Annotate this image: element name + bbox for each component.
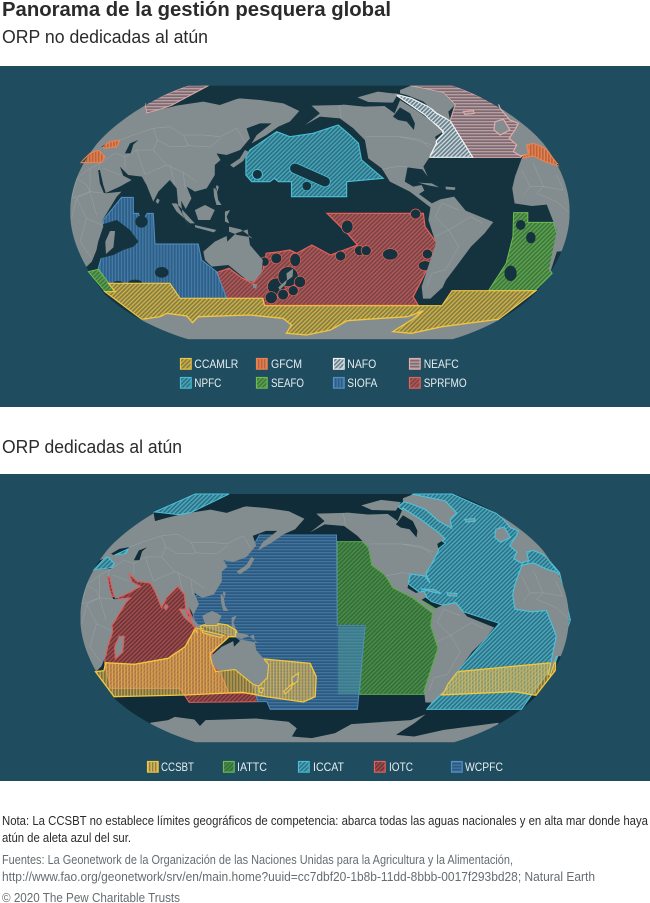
land masses xyxy=(70,494,576,753)
legend: tuna RFMOs xyxy=(148,760,503,774)
legend item: SEAFO: SEAFO xyxy=(271,376,304,390)
legend item: IATTC xyxy=(224,760,267,774)
legend item: IOTC: IOTC xyxy=(389,760,413,774)
world map 2 xyxy=(70,494,576,753)
region: SPRFMO xyxy=(217,209,437,305)
overlap: IATTC and WCPFC xyxy=(338,627,365,694)
sources xyxy=(2,853,595,884)
subtitle: non-tuna RFMOs: ORP no dedicadas al atún xyxy=(2,26,208,47)
region: SIOFA xyxy=(98,197,227,298)
legend item: GFCM xyxy=(256,357,302,371)
legend item: NAFO xyxy=(334,357,376,371)
legend item: NEAFC: NEAFC xyxy=(424,357,459,371)
sources: Fuentes: La Geonetwork de la Organización de las Naciones Unidas para la Agricultura y la Alimentación, xyxy=(2,853,513,867)
region: WCPFC xyxy=(190,535,365,709)
region: CCSBT xyxy=(95,623,556,702)
legend item: SIOFA xyxy=(334,376,377,390)
region: NAFO xyxy=(395,94,473,157)
legend item: SEAFO xyxy=(256,376,304,390)
legend item: NPFC: NPFC xyxy=(194,376,222,390)
legend item: NAFO: NAFO xyxy=(347,357,376,371)
legend item: WCPFC: WCPFC xyxy=(465,760,503,774)
coast outlines xyxy=(94,494,560,703)
legend item: SPRFMO: SPRFMO xyxy=(424,376,467,390)
coast outlines xyxy=(80,86,560,336)
legend item: NPFC xyxy=(180,376,222,390)
legend item: NEAFC xyxy=(410,357,459,371)
legend item: SIOFA: SIOFA xyxy=(347,376,377,390)
region: IATTC xyxy=(337,542,445,694)
legend item: SPRFMO xyxy=(410,376,467,390)
legend item: CCAMLR: CCAMLR xyxy=(194,357,239,371)
legend: non-tuna RFMOs xyxy=(180,357,467,390)
note xyxy=(2,814,648,845)
legend item: WCPFC xyxy=(452,760,503,774)
legend item: GFCM: GFCM xyxy=(271,357,302,371)
world map 1 xyxy=(60,85,577,350)
note: atún de aleta azul del sur. xyxy=(2,831,131,845)
region: ICCAT xyxy=(94,494,570,709)
legend item: ICCAT xyxy=(298,760,345,774)
region: GFCM xyxy=(82,141,558,166)
region: NPFC xyxy=(246,125,383,197)
subtitle: tuna RFMOs: ORP dedicadas al atún xyxy=(2,436,182,457)
legend item: IOTC xyxy=(374,760,413,774)
legend item: ICCAT: ICCAT xyxy=(313,760,345,774)
region: SEAFO xyxy=(88,213,557,292)
region: NEAFC xyxy=(145,85,540,157)
region: IOTC xyxy=(105,570,258,702)
panel: non-tuna RFMO map xyxy=(0,66,650,407)
legend item: CCSBT xyxy=(148,760,195,774)
sources: http://www.fao.org/geonetwork/srv/en/main.home?uuid=cc7dbf20-1b8b-11dd-8bbb-0017f293bd28; Natural Earth xyxy=(2,870,595,884)
land masses xyxy=(60,86,577,350)
panel: tuna RFMO map xyxy=(0,474,650,781)
legend item: CCAMLR xyxy=(180,357,239,371)
legend item: CCSBT: CCSBT xyxy=(161,760,195,774)
region: CCAMLR xyxy=(105,283,536,337)
legend item: IATTC: IATTC xyxy=(237,760,267,774)
